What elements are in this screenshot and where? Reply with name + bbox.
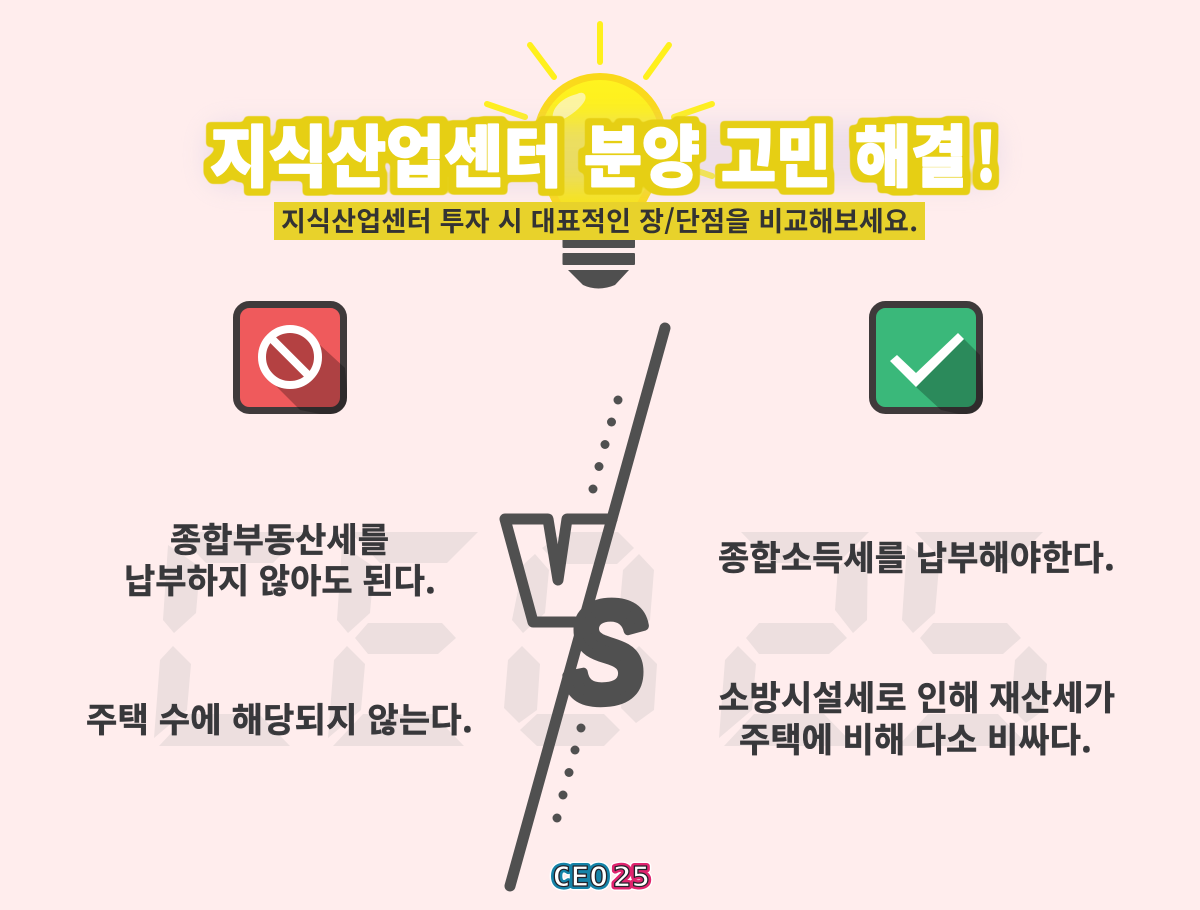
logo: CEO 25: 25: [613, 860, 650, 893]
left text: cons: [86, 513, 473, 742]
dotted accent lines: [552, 396, 622, 822]
title glow: [205, 122, 1000, 188]
logo: CEO 25: 25: [613, 860, 650, 893]
title: !: [976, 104, 996, 201]
right text: pros: 주택에 비해 다소 비싸다.: [739, 713, 1092, 762]
icon: check mark (pros): [872, 304, 985, 420]
VS mark: V outline: [505, 519, 612, 622]
title: 지식산업센터: [210, 104, 562, 201]
background digits: CEO 25: [154, 532, 1047, 746]
logo: CEO 25: 25: [613, 860, 650, 893]
right text: pros: 소방시설세로 인해 재산세가: [718, 671, 1115, 720]
left text: cons: 납부하지 않아도 된다.: [124, 554, 436, 603]
icon: prohibited sign (cons): [236, 304, 350, 420]
right text: pros: [718, 531, 1115, 762]
subtitle band: 지식산업센터 투자 시 대표적인 장/단점을 비교해보세요.: [281, 200, 918, 239]
left text: cons: 주택 수에 해당되지 않는다.: [86, 693, 473, 742]
title: 분양: [584, 104, 700, 201]
logo: CEO 25: CEO: [552, 860, 608, 893]
logo: CEO 25: CEO: [552, 860, 608, 893]
title: [210, 104, 996, 201]
title: 해결: [855, 104, 967, 201]
VS mark: S: S: [565, 573, 646, 731]
right text: pros: 종합소득세를 납부해야한다.: [718, 531, 1115, 580]
icon: light bulb: [487, 24, 712, 288]
left text: cons: 종합부동산세를: [170, 513, 389, 562]
title: 고민: [721, 104, 831, 201]
logo: CEO 25: CEO: [552, 860, 608, 893]
diagonal divider: [510, 328, 665, 886]
logo: CEO 25: [552, 860, 650, 893]
